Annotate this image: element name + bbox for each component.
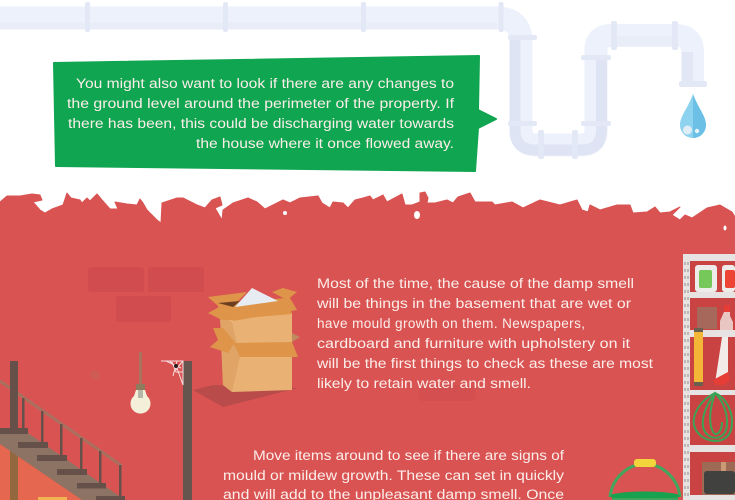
body text: checking for mould: Move items around to see if there are signs of	[253, 448, 564, 463]
callout: green speech bubble	[54, 56, 496, 171]
body text: what causes the smell	[316, 276, 653, 391]
paper	[235, 288, 278, 307]
callout text: You might also want to look if there are any changes to	[76, 76, 454, 91]
staircase	[0, 361, 125, 500]
torn edge specks	[283, 211, 726, 230]
callout text	[67, 76, 454, 151]
body text: what causes the smell: will be things in the basement that are wet or	[316, 296, 632, 311]
box body	[220, 313, 292, 392]
wall bricks	[88, 267, 475, 401]
toolbox	[702, 462, 735, 495]
panel: red basement wall with torn edge	[0, 192, 735, 500]
callout text: the house where it once flowed away.	[196, 136, 454, 151]
body text: what causes the smell: likely to retain water and smell.	[317, 376, 531, 391]
cardboard boxes	[193, 288, 300, 407]
icon: green bucket	[610, 459, 680, 500]
icon: hanging light bulb	[131, 352, 150, 414]
plumbing pipes	[0, 2, 707, 159]
middle shelf and tools	[690, 305, 735, 386]
body text: what causes the smell: have mould growth on them. Newspapers,	[317, 316, 585, 331]
pipe shading	[515, 40, 602, 150]
shelving unit	[683, 254, 735, 500]
storage tubs	[695, 265, 735, 292]
wooden post with cobweb	[161, 361, 192, 500]
coiled green hose	[694, 393, 732, 441]
body text: checking for mould	[223, 448, 564, 500]
shelf upright holes	[685, 262, 688, 498]
body text: what causes the smell: cardboard and furniture with upholstery on it	[317, 336, 630, 351]
box opening	[217, 298, 292, 320]
icon: water drop	[680, 94, 706, 138]
body text: checking for mould: mould or mildew growth. These can set in quickly	[223, 468, 564, 483]
callout text: there has been, this could be discharging water towards	[68, 116, 454, 131]
callout text: the ground level around the perimeter of the property. If	[67, 96, 454, 111]
box shadow	[193, 385, 298, 407]
upper box flaps	[208, 292, 247, 305]
lower box flaps	[233, 342, 298, 357]
body text: what causes the smell: will be the first things to check as these are most	[316, 356, 653, 371]
body text: what causes the smell: Most of the time, the cause of the damp smell	[317, 276, 634, 291]
